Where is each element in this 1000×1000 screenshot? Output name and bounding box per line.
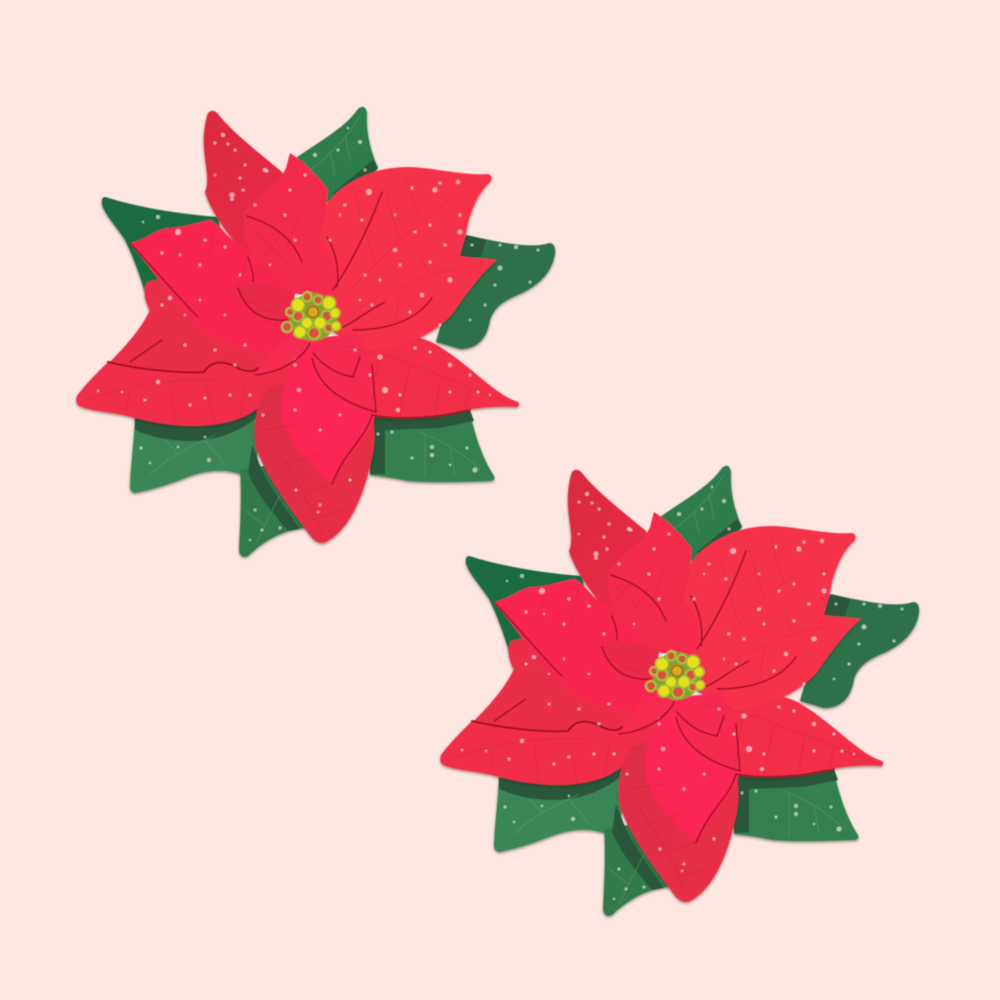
red back leaves xyxy=(76,111,519,543)
petal: back top left xyxy=(204,111,300,260)
petal: right upper large xyxy=(308,167,497,352)
red front petals xyxy=(130,153,376,484)
leaf veins xyxy=(85,115,510,545)
leaf: green bottom xyxy=(239,460,322,557)
petal: small lower left center xyxy=(254,332,312,375)
veins: red petals xyxy=(85,175,510,535)
veins: green leaves xyxy=(150,115,480,545)
flower: lower right poinsettia xyxy=(440,466,919,916)
petal: bottom pink xyxy=(281,335,376,484)
red florets xyxy=(282,292,334,339)
leaf shadows on green xyxy=(135,160,486,531)
center stamen xyxy=(308,306,318,318)
flower: upper left poinsettia xyxy=(76,107,555,557)
snow speckles xyxy=(97,127,540,541)
leaf: green lower right xyxy=(368,412,494,482)
petal: center upper xyxy=(303,240,337,296)
petal: small left center xyxy=(238,283,295,322)
petal: left pink xyxy=(130,220,300,353)
petal: right lower xyxy=(340,332,519,418)
green leaves xyxy=(102,107,555,557)
leaf: green left xyxy=(102,197,232,318)
petal: lower left large xyxy=(76,362,305,426)
center base xyxy=(289,293,337,341)
leaf: green lower left xyxy=(130,405,262,493)
leaf: green top right xyxy=(296,107,378,212)
flower center xyxy=(282,292,340,341)
petal: top center xyxy=(244,153,328,295)
dark petal outlines xyxy=(108,192,470,484)
petal: bottom back xyxy=(254,370,374,543)
petal: small bottom right xyxy=(312,334,376,412)
leaf: green right xyxy=(436,235,555,349)
yellow florets xyxy=(292,296,340,338)
petal: back lower left upper layer xyxy=(100,279,300,400)
